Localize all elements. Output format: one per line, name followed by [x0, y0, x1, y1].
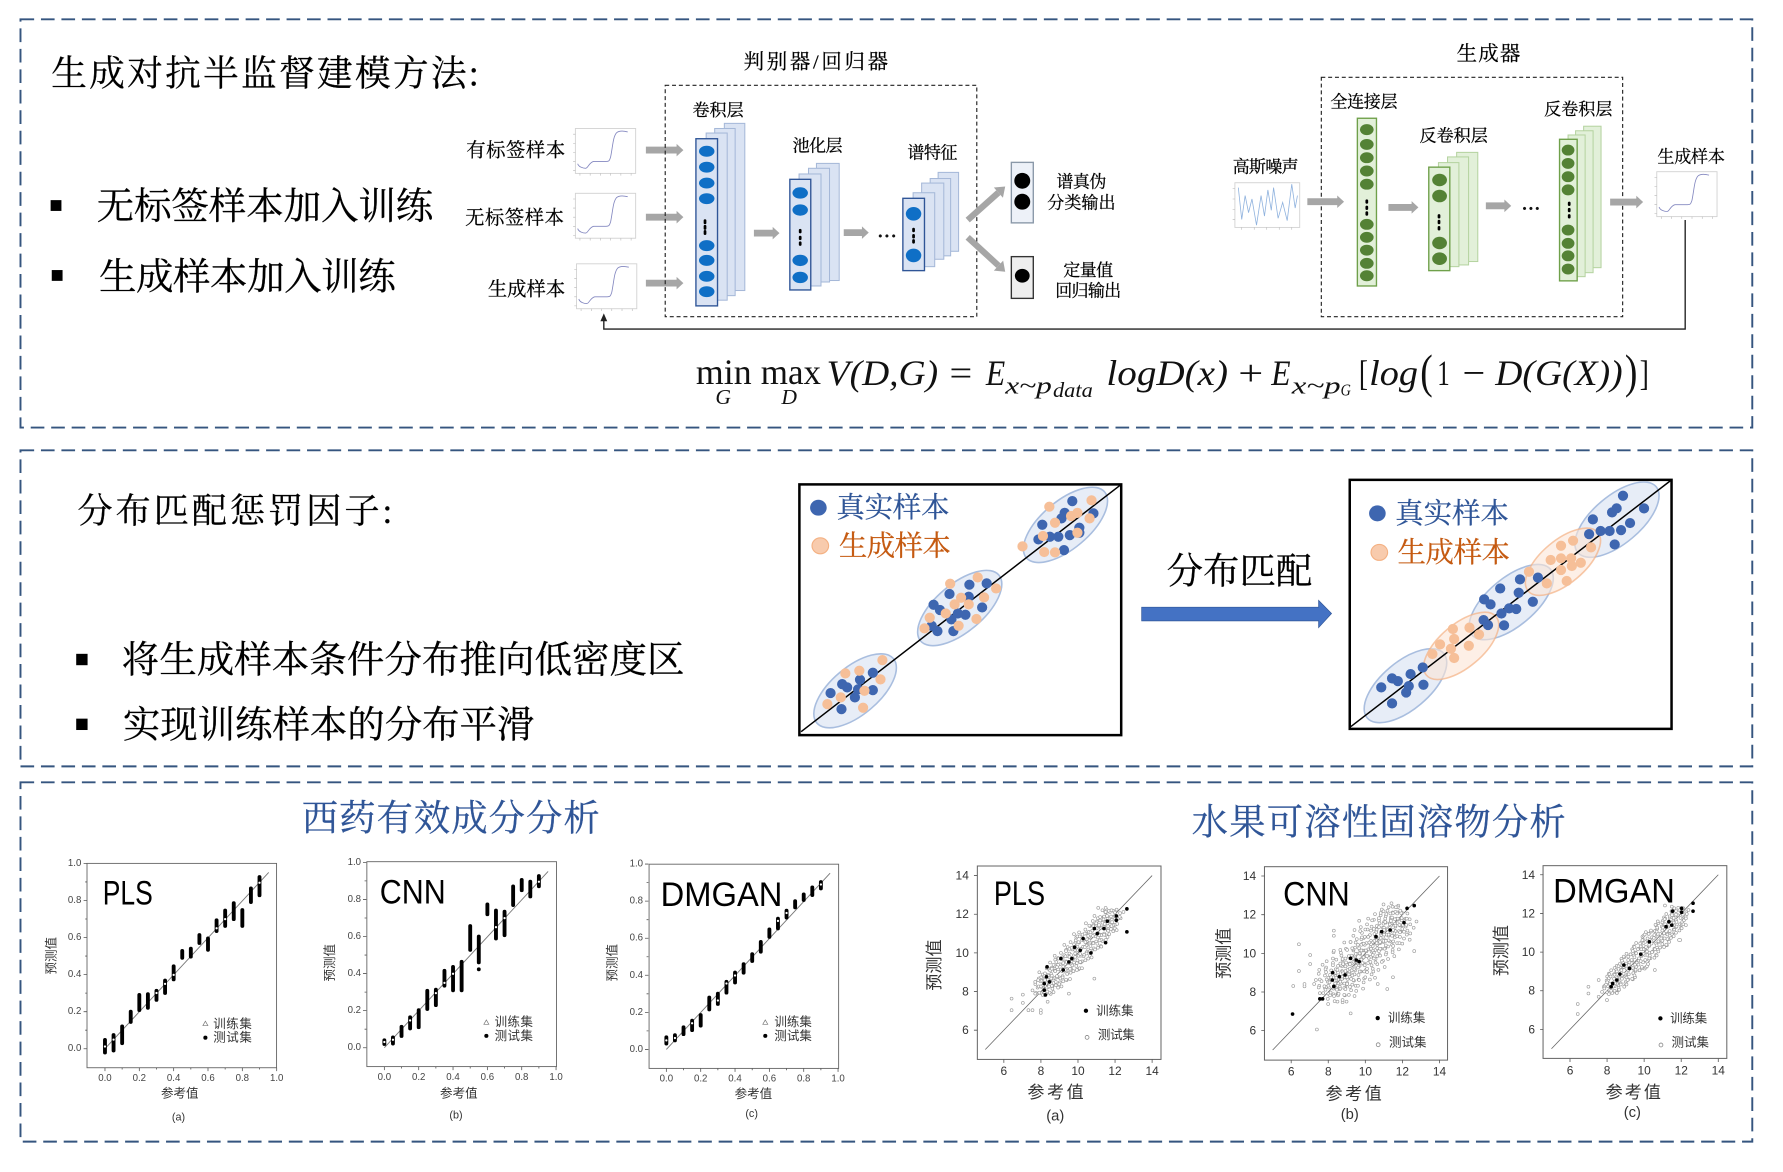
label: generated sample: 生成样本: [1657, 148, 1725, 167]
chart: pharma CNN: (b): [449, 1109, 463, 1121]
chart: fruit PLS: 12: [956, 907, 969, 921]
chart: fruit DMGAN: 参考值: [1606, 1083, 1661, 1102]
chart: pharma PLS: 0.6: [68, 932, 81, 943]
chart: fruit CNN: 参考值: [1326, 1084, 1382, 1103]
chart: fruit CNN: 14: [1433, 1065, 1446, 1079]
output: quantitative regression: [1011, 257, 1121, 301]
legend: before matching: 生成样本: [839, 530, 951, 562]
heading: penalty factor: 分布匹配惩罚因子:: [77, 492, 392, 531]
chart: fruit DMGAN: 14: [1712, 1063, 1725, 1077]
chart: fruit DMGAN: 预测值: [1492, 925, 1511, 976]
chart: pharma PLS: 0.0: [68, 1043, 81, 1054]
output: real/fake classification: 谱真伪: [1056, 172, 1106, 191]
bullet list: training points: 生成样本加入训练: [99, 257, 397, 299]
chart: fruit DMGAN: 训练集: [1670, 1010, 1708, 1025]
chart: pharma PLS: 测试集: [213, 1030, 252, 1045]
chart: pharma DMGAN: 0.2: [694, 1073, 707, 1084]
chart: pharma DMGAN: 预测值: [605, 944, 620, 982]
panel: distribution matching penalty: [20, 450, 1752, 766]
chart: fruit CNN: 8: [1250, 985, 1257, 999]
input labels: 生成样本: [488, 278, 565, 300]
chart: pharma CNN: 1.0: [348, 857, 361, 868]
input labels: 有标签样本: [466, 140, 565, 162]
chart: pharma CNN: 预测值: [322, 944, 337, 982]
label: gaussian noise: 高斯噪声: [1233, 158, 1299, 177]
formula: log: [1369, 353, 1418, 393]
chart: pharma CNN: 0.8: [515, 1072, 528, 1083]
arrow: deconv onward: [1486, 200, 1511, 212]
output: quantitative regression: 定量值: [1063, 261, 1113, 280]
chart: fruit PLS: 14: [1145, 1064, 1159, 1078]
chart: fruit CNN: 训练集: [1388, 1010, 1426, 1025]
chart: fruit DMGAN: 测试集: [1672, 1035, 1710, 1050]
chart: pharma CNN: 0.6: [348, 931, 361, 942]
formula: V(D,G): [827, 353, 938, 393]
chart: fruit PLS: 12: [1108, 1064, 1122, 1078]
heading: discriminator/regressor: 判别器/回归器: [744, 51, 888, 74]
chart: pharma DMGAN: [605, 859, 845, 1120]
chart: pharma DMGAN: 0.8: [630, 896, 643, 907]
chart: fruit DMGAN: 6: [1567, 1063, 1574, 1077]
ellipsis: ...: [878, 221, 896, 242]
chart: pharma DMGAN: 0.2: [630, 1007, 643, 1018]
arrow: FC to deconv: [1388, 201, 1418, 214]
output: real/fake classification: [1011, 162, 1116, 223]
chart: fruit DMGAN: 8: [1604, 1063, 1611, 1077]
bullet list: training points: [51, 186, 435, 299]
chart: fruit DMGAN: 6: [1528, 1022, 1535, 1036]
chart: fruit DMGAN: 12: [1675, 1063, 1688, 1077]
chart: fruit PLS: 预测值: [925, 939, 944, 991]
ellipsis: ...: [1522, 194, 1540, 215]
chart: pharma DMGAN: 0.6: [630, 933, 643, 944]
chart: pharma PLS: 参考值: [161, 1085, 199, 1100]
arrow: generator to output: [1610, 196, 1643, 208]
panel: GAN semi-supervised modelling: [20, 19, 1752, 428]
chart: pharma PLS: 训练集: [213, 1016, 252, 1031]
chart: fruit PLS: [925, 866, 1161, 1125]
bullet list: penalty effects: 实现训练样本的分布平滑: [123, 705, 534, 747]
chart: pharma DMGAN: 测试集: [774, 1028, 812, 1043]
chart: pharma CNN: [322, 857, 563, 1121]
chart: fruit CNN: 10: [1359, 1065, 1372, 1079]
chart: fruit CNN: 预测值: [1214, 928, 1233, 979]
formula: [: [1359, 353, 1368, 393]
chart: pharma DMGAN: 0.6: [763, 1073, 776, 1084]
chart: fruit DMGAN: 8: [1528, 984, 1535, 998]
chart: pharma PLS: [44, 858, 283, 1123]
chart: pharma PLS: 0.2: [68, 1006, 81, 1017]
chart: pharma DMGAN: 0.8: [797, 1073, 810, 1084]
formula: ): [1625, 345, 1637, 398]
arrow: noise to generator: [1307, 195, 1344, 208]
chart: fruit DMGAN: DMGAN: [1553, 872, 1675, 910]
chart: fruit DMGAN: 10: [1522, 945, 1535, 959]
label: deconv layer 2: 反卷积层: [1544, 100, 1613, 119]
chart: fruit DMGAN: 10: [1638, 1063, 1651, 1077]
legend: before matching: [810, 492, 951, 562]
chart: fruit CNN: 6: [1250, 1024, 1257, 1038]
formula: D(G(X)): [1494, 353, 1623, 393]
chart: fruit DMGAN: (c): [1624, 1105, 1641, 1121]
chart: pharma DMGAN: 0.0: [630, 1044, 643, 1055]
chart: fruit DMGAN: 12: [1522, 906, 1535, 920]
chart: pharma CNN: 0.4: [348, 968, 362, 979]
chart: pharma PLS: PLS: [103, 874, 153, 912]
input spectra thumbnails: [573, 128, 637, 311]
chart: pharma CNN: 0.8: [348, 894, 361, 905]
chart: fruit CNN: [1214, 867, 1448, 1123]
chart: pharma CNN: 训练集: [495, 1014, 533, 1029]
chart: pharma PLS: 1.0: [270, 1073, 283, 1084]
output: real/fake classification: 分类输出: [1047, 194, 1116, 213]
label: distribution matching: 分布匹配: [1167, 552, 1312, 592]
scatter: after matching: [1350, 468, 1672, 736]
chart: pharma PLS: 0.8: [68, 895, 81, 906]
input labels: [465, 140, 565, 300]
chart: fruit PLS: 8: [962, 985, 969, 999]
chart: pharma CNN: 0.0: [378, 1072, 391, 1083]
chart: pharma CNN: 测试集: [495, 1028, 533, 1043]
chart: fruit CNN: 10: [1243, 946, 1257, 960]
chart: pharma PLS: 0.4: [167, 1073, 181, 1084]
chart: pharma CNN: 0.4: [446, 1072, 460, 1083]
chart: pharma DMGAN: 参考值: [735, 1086, 772, 1101]
chart: fruit PLS: 测试集: [1098, 1027, 1135, 1042]
legend: after matching: 生成样本: [1398, 537, 1510, 569]
deconv stack 2: [1560, 126, 1601, 281]
label: pooling layer: 池化层: [793, 137, 844, 156]
chart: pharma DMGAN: 0.4: [728, 1073, 742, 1084]
box: discriminator: [665, 85, 977, 317]
box: generator: [1321, 77, 1623, 317]
formula: x~p: [1004, 374, 1052, 400]
chart: pharma PLS: 0.8: [236, 1073, 249, 1084]
chart: fruit CNN: 6: [1288, 1065, 1295, 1079]
chart: fruit DMGAN: 14: [1522, 868, 1535, 882]
formula: ]: [1640, 353, 1649, 393]
chart: pharma DMGAN: (c): [745, 1108, 758, 1120]
chart: fruit DMGAN: [1492, 866, 1727, 1121]
chart: pharma CNN: 0.0: [348, 1042, 361, 1053]
chart: fruit CNN: 12: [1243, 908, 1257, 922]
formula: =: [949, 353, 972, 393]
chart: pharma PLS: 1.0: [68, 858, 81, 869]
pooling layer stack: [790, 163, 839, 290]
formula: min: [696, 352, 752, 392]
formula: G: [1341, 381, 1351, 400]
chart: fruit PLS: PLS: [994, 875, 1045, 913]
noise thumbnail: [1233, 183, 1300, 230]
formula: x~p: [1290, 374, 1341, 400]
output: quantitative regression: 回归输出: [1055, 282, 1121, 301]
chart: pharma CNN: 0.2: [412, 1072, 425, 1083]
chart: fruit CNN: CNN: [1283, 875, 1350, 913]
heading: pharmaceutical analysis: 西药有效成分分析: [302, 799, 600, 839]
chart: pharma PLS: 0.6: [201, 1073, 215, 1084]
scatter: before matching: [799, 474, 1121, 741]
chart: pharma CNN: CNN: [380, 873, 446, 911]
formula: E: [1270, 353, 1291, 393]
chart: pharma DMGAN: 0.0: [660, 1073, 673, 1084]
chart: fruit CNN: 12: [1396, 1065, 1409, 1079]
legend: after matching: 真实样本: [1395, 498, 1509, 530]
bullet list: penalty effects: 将生成样本条件分布推向低密度区: [122, 640, 685, 682]
formula: data: [1053, 378, 1093, 402]
formula: −: [1462, 353, 1485, 393]
chart: fruit PLS: 10: [956, 946, 969, 960]
label: spectral features: 谱特征: [907, 144, 957, 163]
heading: generator: 生成器: [1457, 43, 1520, 66]
chart: pharma PLS: 预测值: [44, 937, 59, 974]
chart: pharma PLS: (a): [172, 1111, 185, 1123]
fully connected layer: [1357, 118, 1376, 286]
formula: logD(x): [1106, 353, 1228, 393]
label: deconv layer 1: 反卷积层: [1420, 127, 1489, 146]
arrow: matching: [1142, 600, 1332, 628]
chart: fruit CNN: 测试集: [1389, 1034, 1427, 1049]
chart: fruit PLS: 10: [1071, 1064, 1085, 1078]
bullet list: training points: 无标签样本加入训练: [97, 186, 435, 228]
chart: fruit PLS: 6: [962, 1023, 969, 1037]
heading: method title: 生成对抗半监督建模方法:: [51, 53, 479, 93]
chart: fruit PLS: 6: [1001, 1064, 1008, 1078]
formula: max: [761, 352, 821, 392]
formula: E: [985, 353, 1005, 393]
heading: fruit soluble solids analysis: 水果可溶性固溶物分析: [1192, 803, 1566, 843]
chart: pharma DMGAN: 1.0: [831, 1073, 845, 1084]
bullet list: penalty effects: [76, 640, 685, 747]
generated spectrum thumbnail: [1654, 172, 1717, 219]
arrow: conv to pool: [754, 227, 779, 239]
chart: pharma CNN: 参考值: [440, 1085, 478, 1100]
arrows: inputs to discriminator: [646, 144, 683, 289]
formula: D: [780, 385, 797, 409]
input labels: 无标签样本: [465, 207, 564, 229]
arrows: features to outputs: [968, 186, 1005, 272]
formula: (: [1420, 345, 1433, 398]
label: conv layer: 卷积层: [693, 101, 745, 120]
chart: pharma CNN: 0.6: [481, 1072, 494, 1083]
panel: results: [20, 782, 1752, 1142]
chart: fruit CNN: 8: [1325, 1065, 1332, 1079]
chart: fruit PLS: (a): [1046, 1109, 1064, 1125]
chart: pharma PLS: 0.0: [98, 1073, 112, 1084]
chart: pharma DMGAN: 0.4: [630, 970, 644, 981]
chart: pharma CNN: 1.0: [549, 1072, 563, 1083]
chart: fruit CNN: (b): [1341, 1107, 1359, 1123]
chart: fruit PLS: 训练集: [1096, 1003, 1134, 1018]
conv layer stack: [696, 123, 745, 306]
deconv stack 1: [1429, 152, 1478, 271]
chart: pharma CNN: 0.2: [348, 1005, 361, 1016]
chart: fruit PLS: 参考值: [1027, 1083, 1084, 1102]
label: fully connected layer: 全连接层: [1330, 92, 1398, 111]
feature stack: [903, 172, 959, 271]
chart: fruit CNN: 14: [1243, 869, 1257, 883]
formula: 1: [1437, 353, 1450, 393]
legend: after matching: [1369, 498, 1510, 569]
arrow: pool to features: [844, 226, 869, 239]
chart: pharma DMGAN: 1.0: [630, 859, 643, 870]
legend: before matching: 真实样本: [836, 492, 949, 524]
chart: pharma DMGAN: 训练集: [774, 1014, 812, 1029]
chart: fruit PLS: 8: [1038, 1064, 1045, 1078]
chart: fruit PLS: 14: [956, 869, 969, 883]
chart: pharma PLS: 0.4: [68, 969, 82, 980]
formula: +: [1238, 353, 1263, 393]
chart: pharma DMGAN: DMGAN: [661, 876, 782, 914]
chart: pharma PLS: 0.2: [133, 1073, 146, 1084]
feedback arrow: [600, 220, 1685, 329]
formula: [696, 345, 1649, 409]
formula: G: [715, 385, 731, 409]
